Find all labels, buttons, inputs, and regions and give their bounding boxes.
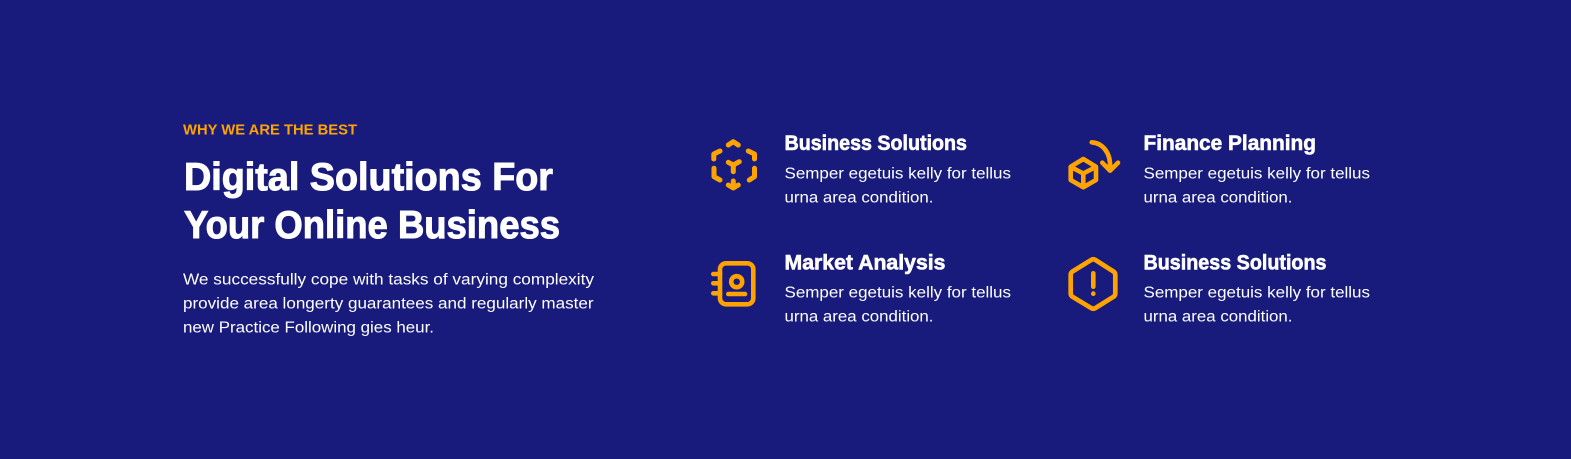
intro paragraph bbox=[183, 272, 594, 336]
intro paragraph: We successfully cope with tasks of varying complexity bbox=[183, 272, 594, 288]
icon: address book bbox=[713, 263, 753, 304]
description bbox=[784, 284, 1011, 326]
title: Business Solutions bbox=[1144, 250, 1327, 274]
description: urna area condition. bbox=[784, 308, 934, 326]
heading bbox=[184, 156, 560, 247]
description: urna area condition. bbox=[1144, 308, 1292, 326]
title: Market Analysis bbox=[784, 250, 946, 274]
feature: Finance Planning (top right) bbox=[1071, 131, 1370, 206]
description: Semper egetuis kelly for tellus bbox=[1144, 284, 1370, 302]
description: urna area condition. bbox=[1144, 190, 1292, 206]
feature: Market Analysis (bottom left) bbox=[713, 250, 1011, 326]
heading: Digital Solutions For bbox=[184, 156, 553, 199]
description bbox=[1144, 284, 1370, 326]
description: Semper egetuis kelly for tellus bbox=[784, 284, 1011, 302]
description: Semper egetuis kelly for tellus bbox=[1144, 166, 1370, 182]
description bbox=[1144, 166, 1370, 206]
intro paragraph: new Practice Following gies heur. bbox=[183, 320, 434, 336]
feature: Business Solutions (top left) bbox=[714, 131, 1011, 206]
eyebrow: WHY WE ARE THE BEST bbox=[183, 123, 357, 139]
description: Semper egetuis kelly for tellus bbox=[784, 166, 1011, 182]
description: urna area condition. bbox=[784, 190, 934, 206]
intro paragraph: provide area longerty guarantees and regularly master bbox=[183, 296, 594, 312]
feature: Business Solutions (bottom right) bbox=[1071, 250, 1370, 326]
icon: dashed cube bbox=[714, 142, 754, 188]
heading: Your Online Business bbox=[184, 204, 560, 247]
icon: cube with curved arrow bbox=[1071, 142, 1118, 187]
title: Business Solutions bbox=[784, 131, 967, 155]
description bbox=[784, 166, 1011, 206]
title: Finance Planning bbox=[1144, 131, 1316, 155]
intro panel bbox=[183, 123, 594, 336]
icon: hexagon alert bbox=[1071, 259, 1115, 309]
